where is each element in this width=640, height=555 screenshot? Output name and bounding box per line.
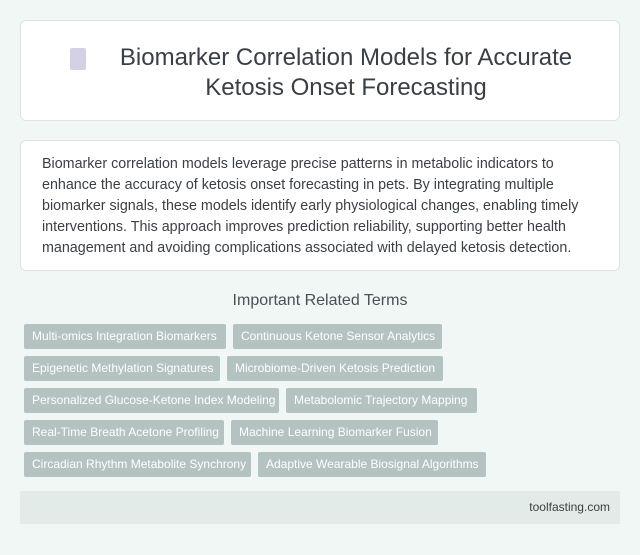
- tags: Circadian Rhythm Metabolite Synchrony: [32, 457, 246, 471]
- title: Biomarker Correlation Models for Accurate: [120, 44, 572, 71]
- title: [120, 44, 572, 101]
- tags: Multi-omics Integration Biomarkers: [32, 329, 217, 343]
- footer text: toolfasting.com: [529, 500, 610, 514]
- tags: Machine Learning Biomarker Fusion: [239, 425, 432, 439]
- icon: document: [70, 48, 86, 70]
- description card: [20, 140, 620, 271]
- footer: [20, 491, 620, 524]
- title: Ketosis Onset Forecasting: [205, 74, 487, 101]
- tags: Epigenetic Methylation Signatures: [32, 361, 213, 375]
- tags: Metabolomic Trajectory Mapping: [294, 393, 467, 407]
- tags: Microbiome-Driven Ketosis Prediction: [235, 361, 435, 375]
- description text: Biomarker correlation models leverage precise patterns in metabolic indicators to enhance the accuracy of ketosis onset forecasting in pets. By integrating multiple biomarker signals, these models identify early physiological changes, enabling timely interventions. This approach improves prediction reliability, supporting better health management and avoiding complications associated with delayed ketosis detection.: [42, 156, 578, 256]
- section heading: Important Related Terms: [233, 292, 407, 309]
- tags: Continuous Ketone Sensor Analytics: [241, 329, 435, 343]
- tags: Personalized Glucose-Ketone Index Modeling: [32, 393, 275, 407]
- tags: Adaptive Wearable Biosignal Algorithms: [266, 457, 479, 471]
- tags: Real-Time Breath Acetone Profiling: [32, 425, 219, 439]
- header card: [20, 20, 620, 121]
